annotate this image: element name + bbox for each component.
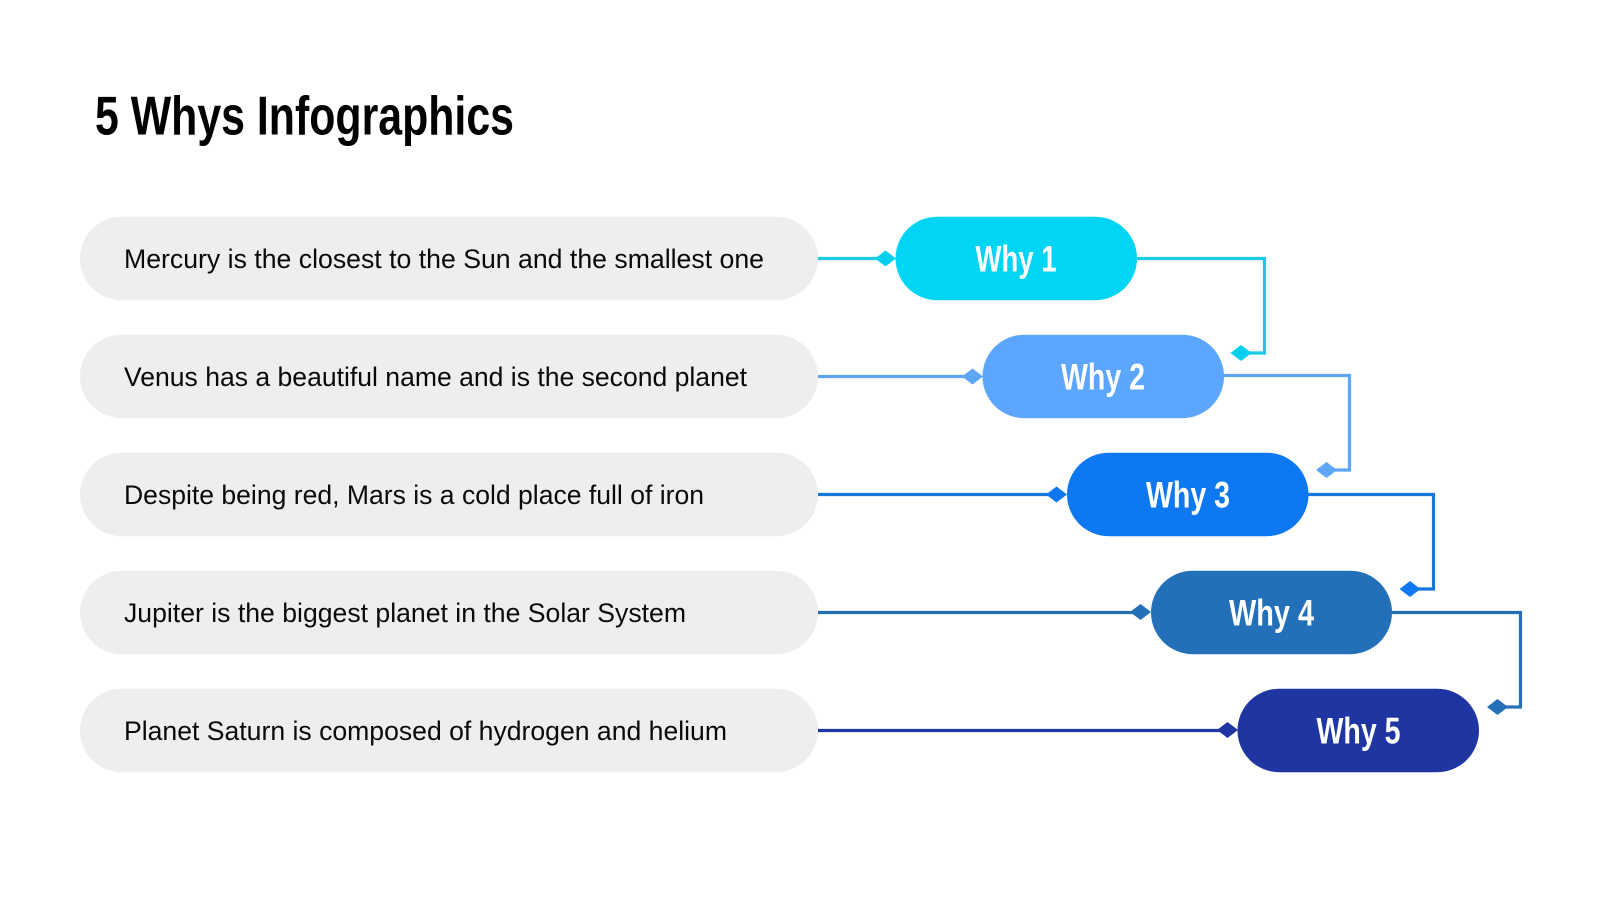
node: Why 3: Why 3 xyxy=(1146,474,1230,516)
node: Why 1: Why 1 xyxy=(976,238,1056,280)
arrow: Mercury statement to Why 1 xyxy=(818,250,896,266)
panel: Jupiter statement: Jupiter is the biggest planet in the Solar System xyxy=(124,598,686,628)
title: 5 Whys Infographics xyxy=(95,84,514,146)
arrow: Saturn statement to Why 5 xyxy=(818,722,1238,738)
panel: Saturn statement: Planet Saturn is composed of hydrogen and helium xyxy=(124,716,727,746)
node: Why 2 xyxy=(982,335,1224,418)
panel: Jupiter statement xyxy=(80,571,818,654)
arrow: Why 1 to Why 2 xyxy=(1137,258,1264,361)
panel: Saturn statement xyxy=(80,689,818,772)
panel: Mercury statement xyxy=(80,217,818,300)
arrow: Jupiter statement to Why 4 xyxy=(818,604,1151,620)
node: Why 5: Why 5 xyxy=(1316,710,1400,752)
node: Why 4 xyxy=(1151,571,1392,654)
node: Why 1 xyxy=(896,217,1137,300)
arrow: Why 4 to Why 5 xyxy=(1392,612,1520,715)
node: Why 4: Why 4 xyxy=(1229,592,1314,634)
arrow: Venus statement to Why 2 xyxy=(818,368,983,384)
arrow: Mars statement to Why 3 xyxy=(818,486,1067,502)
node: Why 2: Why 2 xyxy=(1061,356,1145,398)
node: Why 5 xyxy=(1238,689,1479,772)
node: Why 3 xyxy=(1067,453,1308,536)
panel: Mars statement: Despite being red, Mars is a cold place full of iron xyxy=(124,480,704,510)
arrow: Why 2 to Why 3 xyxy=(1223,376,1350,478)
panel: Mercury statement: Mercury is the closest to the Sun and the smallest one xyxy=(124,244,764,274)
arrow: Why 3 to Why 4 xyxy=(1308,494,1434,597)
panel: Mars statement xyxy=(80,453,818,536)
panel: Venus statement: Venus has a beautiful name and is the second planet xyxy=(124,362,747,392)
panel: Venus statement xyxy=(80,335,818,418)
